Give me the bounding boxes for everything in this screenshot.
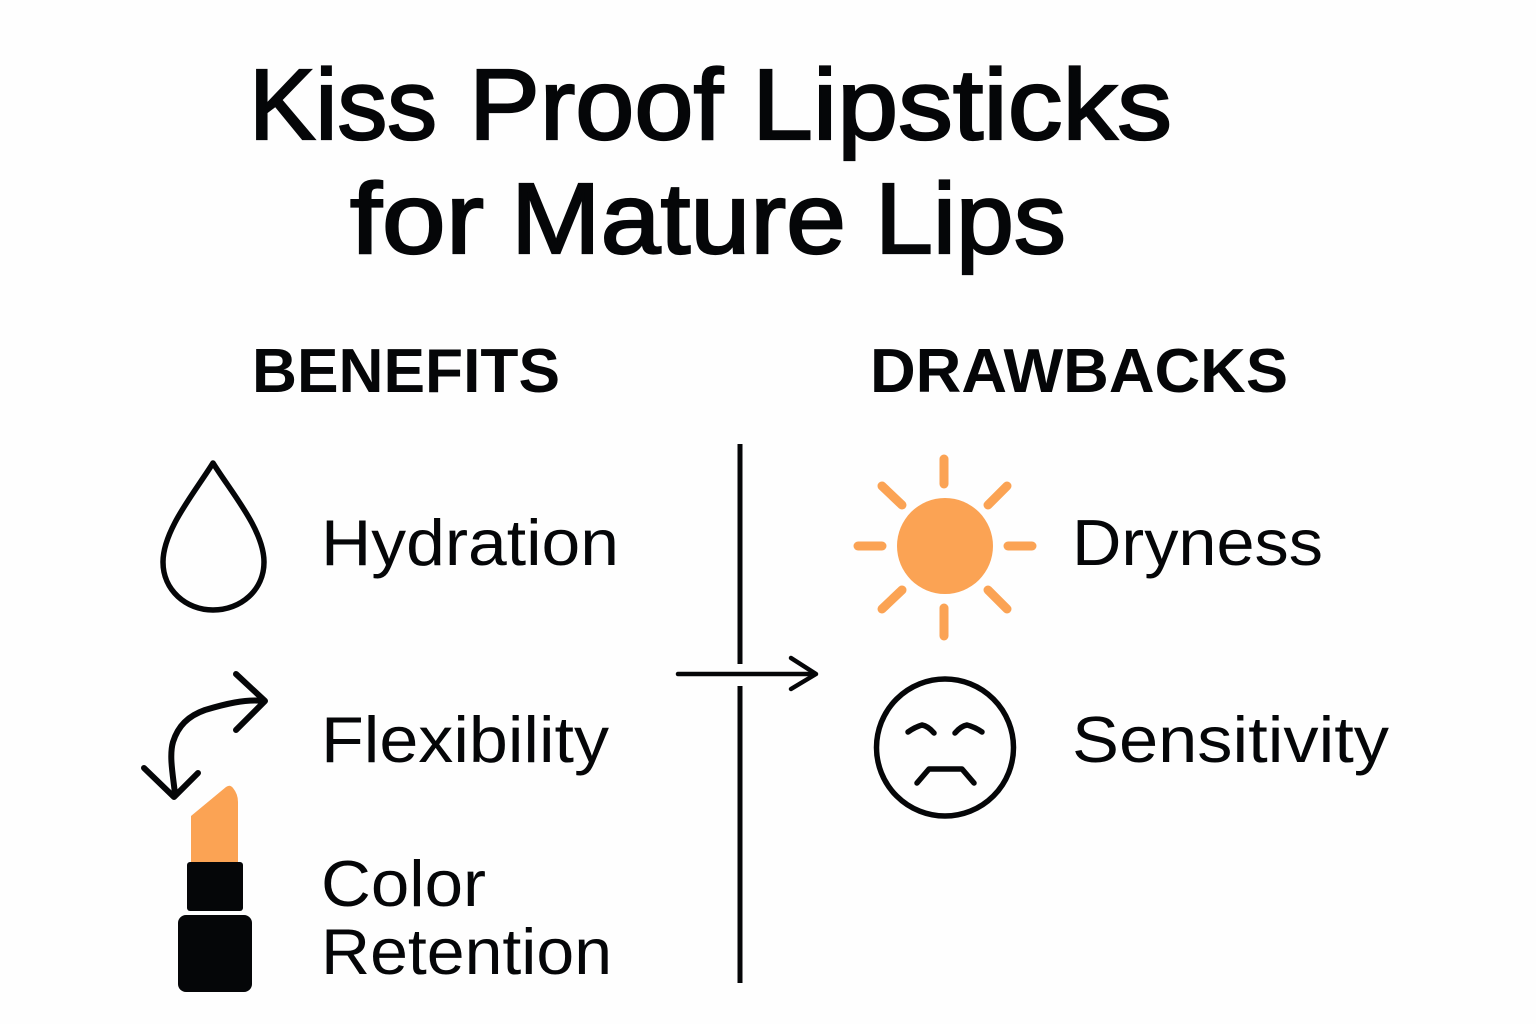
- title: Mature: [511, 163, 846, 275]
- heading: drawbacks: DRAWBACKS: [870, 337, 1288, 406]
- center divider: [738, 444, 742, 983]
- label: color retention: Color: [321, 847, 486, 920]
- label: hydration: Hydration: [321, 506, 619, 579]
- icon: water drop: [163, 463, 264, 610]
- icon: lipstick: [178, 786, 252, 992]
- label: sensitivity: Sensitivity: [1072, 703, 1390, 776]
- heading: benefits: BENEFITS: [252, 337, 560, 406]
- label: flexibility: Flexibility: [321, 703, 610, 776]
- title: Proof: [469, 49, 723, 161]
- title: Lipsticks: [752, 49, 1172, 161]
- label: dryness: Dryness: [1072, 506, 1323, 579]
- title: for: [350, 163, 484, 275]
- title: Kiss: [249, 49, 437, 161]
- label: color retention: Retention: [321, 915, 612, 988]
- icon: sun: [858, 459, 1032, 636]
- label: color retention: [321, 847, 612, 988]
- title: Lips: [875, 163, 1066, 275]
- arrow: [678, 658, 816, 689]
- icon: flexibility arrows: [144, 674, 265, 797]
- icon: sad face: [876, 679, 1014, 816]
- title: [249, 49, 1172, 275]
